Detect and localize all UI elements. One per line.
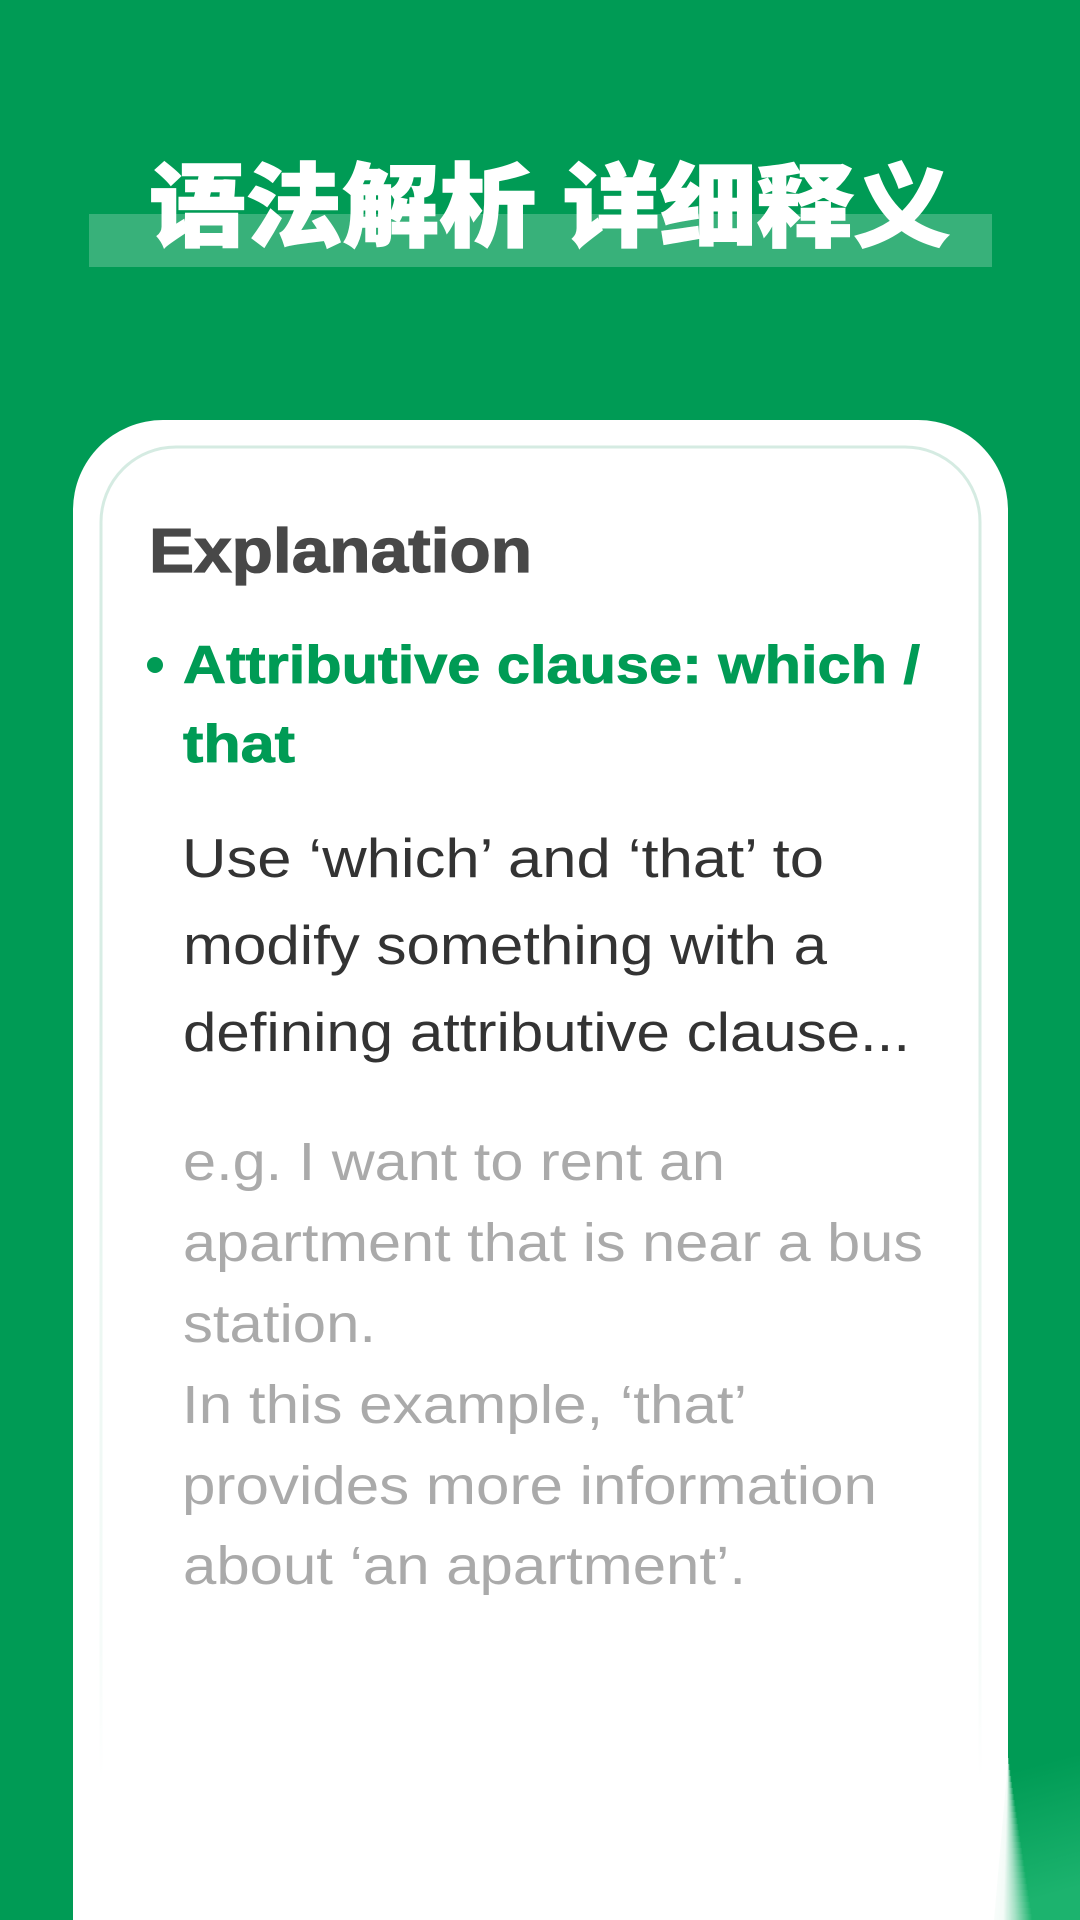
title: 语法解析 详细释义	[149, 158, 950, 259]
title highlight band	[89, 214, 992, 267]
explanation text	[182, 827, 910, 1063]
example text: about ‘an apartment’.	[183, 1536, 746, 1596]
card background	[73, 420, 1008, 1920]
panel: explanation card	[73, 420, 1008, 1920]
subheading line 2: that	[183, 715, 295, 774]
subheading line 1: Attributive clause: which /	[183, 636, 920, 695]
bullet point subheading	[147, 636, 920, 774]
bullet dot	[147, 657, 163, 673]
bottom right glow	[984, 1756, 1080, 1920]
card inner outline	[101, 447, 980, 1780]
example text	[182, 1132, 923, 1596]
explanation text: defining attributive clause...	[183, 1001, 910, 1063]
heading: Explanation: Explanation	[149, 517, 532, 586]
example text: provides more information	[182, 1456, 877, 1516]
explanation text: Use ‘which’ and ‘that’ to	[182, 827, 824, 889]
explanation text: modify something with a	[183, 914, 827, 976]
example text: e.g. I want to rent an	[183, 1132, 725, 1192]
example text: apartment that is near a bus	[183, 1213, 923, 1273]
example text: station.	[183, 1294, 376, 1354]
example text: In this example, ‘that’	[182, 1375, 747, 1435]
